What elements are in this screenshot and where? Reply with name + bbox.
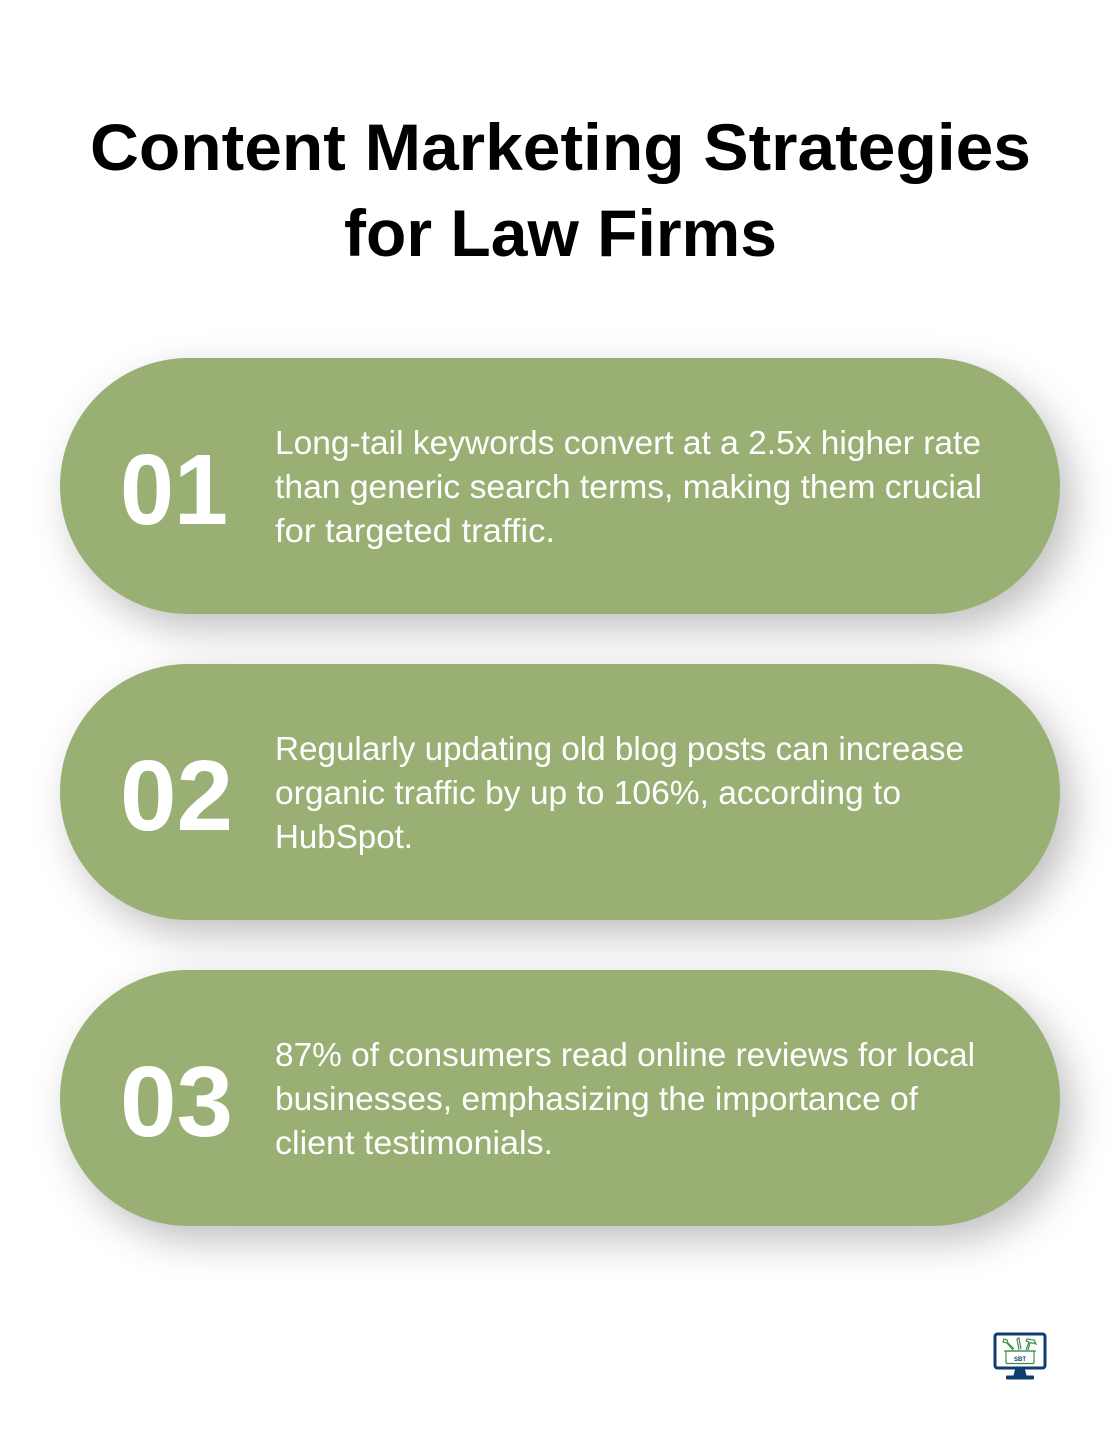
- number 01: 01: [120, 434, 228, 546]
- title: [90, 110, 1031, 270]
- text block: updating blog posts: organic traffic by up to 106%, according to: [275, 774, 901, 811]
- icon: monitor with toolbox logo: SBT: [1014, 1357, 1026, 1363]
- text block: online reviews: 87% of consumers read online reviews for local: [275, 1036, 975, 1073]
- text block: online reviews: client testimonials.: [275, 1124, 553, 1161]
- panel: card 02: [60, 664, 1060, 920]
- panel: card 03: [60, 970, 1060, 1226]
- title: Content Marketing Strategies: [90, 110, 1031, 184]
- text block: long-tail keywords: for targeted traffic.: [275, 512, 555, 549]
- text block: updating blog posts: HubSpot.: [275, 818, 413, 855]
- number 03: 03: [120, 1046, 233, 1158]
- title: for Law Firms: [344, 196, 777, 270]
- text block: online reviews: [275, 1036, 975, 1161]
- text block: long-tail keywords: Long-tail keywords convert at a 2.5x higher rate: [275, 424, 981, 461]
- text block: updating blog posts: Regularly updating old blog posts can increase: [275, 730, 964, 767]
- text block: long-tail keywords: than generic search terms, making them crucial: [275, 468, 982, 505]
- panel: card 01: [60, 358, 1060, 614]
- text block: long-tail keywords: [275, 424, 982, 549]
- number 02: 02: [120, 740, 233, 852]
- icon: monitor with toolbox logo: [994, 1332, 1046, 1380]
- text block: online reviews: businesses, emphasizing the importance of: [275, 1080, 919, 1117]
- text block: updating blog posts: [275, 730, 964, 855]
